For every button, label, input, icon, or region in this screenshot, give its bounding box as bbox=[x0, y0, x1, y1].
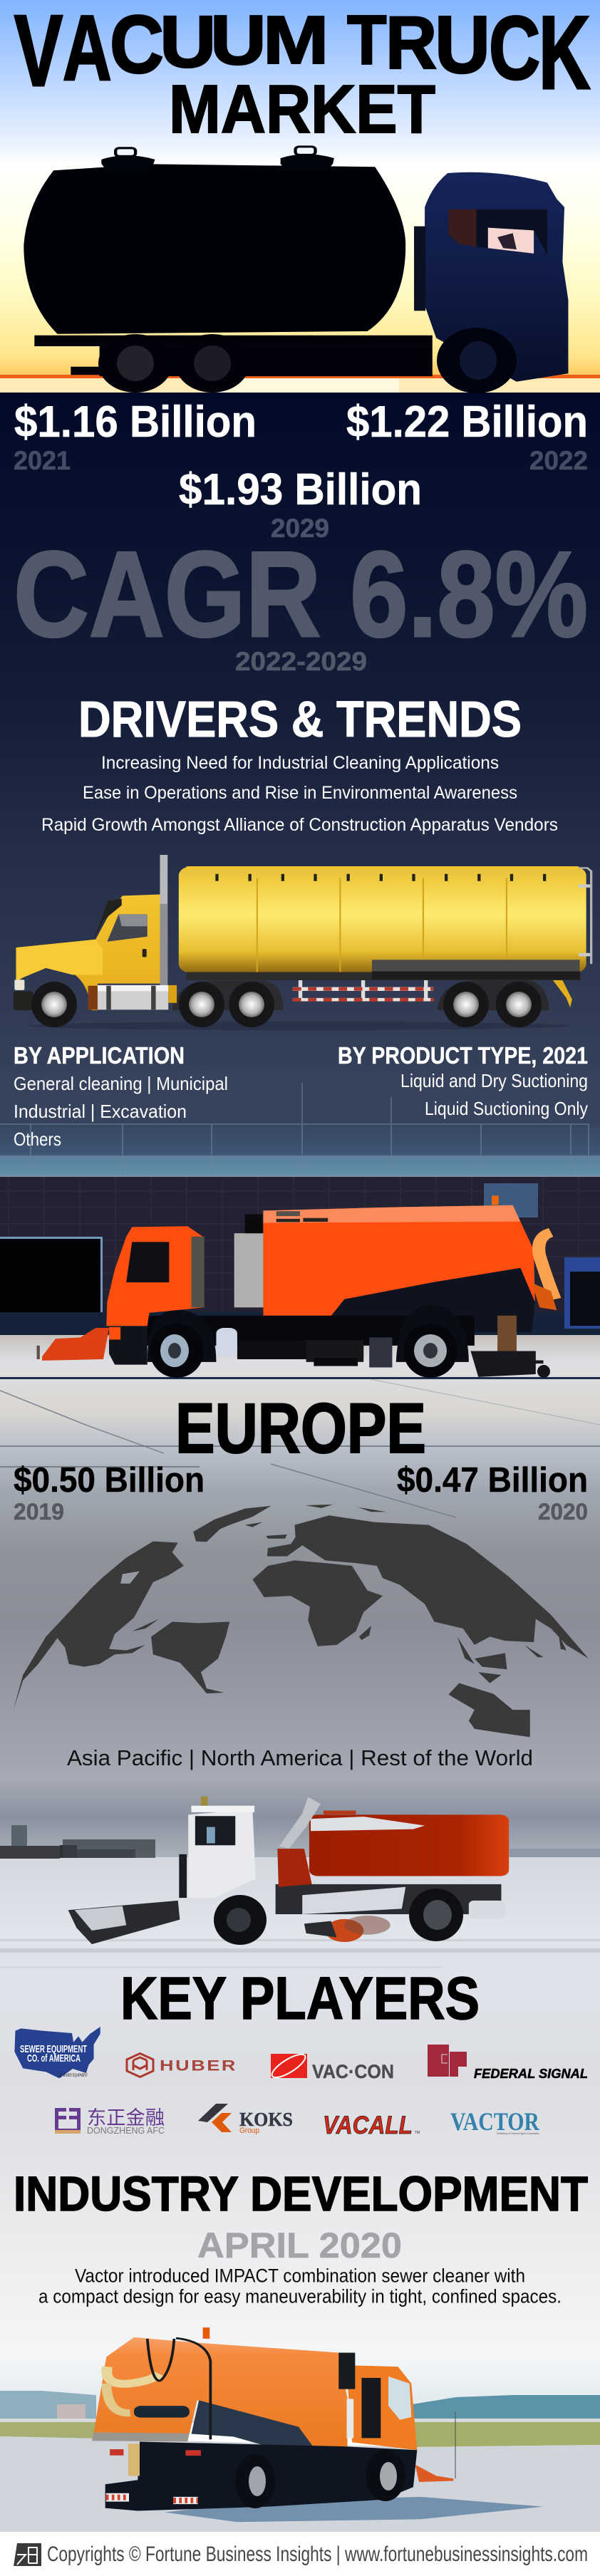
Europe 2020 year: 2020 bbox=[538, 1499, 588, 1525]
logo: Federal Signal bbox=[428, 2045, 588, 2081]
body bbox=[94, 2337, 348, 2446]
driver list: Ease in Operations and Rise in Environmental Awareness bbox=[83, 783, 517, 803]
heading: key players: KEY PLAYERS bbox=[120, 1965, 480, 2032]
chassis bbox=[276, 1884, 501, 1914]
logo: Huber: HUBER bbox=[160, 2057, 237, 2074]
Europe 2019 value: $0.50 Billion bbox=[14, 1461, 205, 1500]
building windows bbox=[0, 1073, 600, 1177]
wheels bbox=[150, 1324, 204, 1378]
brush bbox=[325, 1919, 363, 1942]
cab bbox=[346, 2365, 417, 2450]
driver list bbox=[41, 753, 558, 835]
tank bbox=[309, 1814, 509, 1876]
development date: APRIL 2020 bbox=[197, 2226, 402, 2265]
tank body bbox=[179, 866, 586, 973]
world map bbox=[14, 1505, 589, 1737]
wheels bbox=[214, 1895, 267, 1945]
title: C bbox=[110, 0, 164, 90]
stat: 2029 value: $1.93 Billion bbox=[179, 465, 422, 514]
development description bbox=[38, 2265, 562, 2307]
logo: Vactor: VACTOR bbox=[450, 2107, 540, 2136]
snow sky bbox=[0, 1775, 600, 1858]
cab bbox=[425, 172, 568, 382]
stat: 2021 year: 2021 bbox=[14, 446, 71, 475]
body bbox=[263, 1205, 535, 1319]
wheels bbox=[31, 982, 542, 1027]
snow tracks bbox=[0, 1939, 600, 1968]
application list: Others bbox=[14, 1128, 61, 1150]
Greenland bbox=[193, 1506, 271, 1542]
Africa bbox=[252, 1560, 383, 1646]
South America bbox=[151, 1621, 229, 1693]
stat: 2021 value: $1.16 Billion bbox=[14, 398, 257, 447]
application list bbox=[14, 1073, 228, 1150]
logo: Dongzheng bbox=[55, 2107, 165, 2136]
orange sweeper truck bbox=[92, 2327, 544, 2522]
logo: Vac-Con bbox=[269, 2050, 394, 2082]
panel bbox=[216, 1328, 237, 1356]
snow scene background bbox=[0, 1825, 600, 1859]
ground lines bbox=[0, 1377, 600, 1517]
logo: KOKS bbox=[198, 2104, 293, 2135]
heading: drivers and trends: DRIVERS & TRENDS bbox=[78, 692, 522, 748]
title: M bbox=[263, 1, 329, 78]
stat: 2022 value: $1.22 Billion bbox=[346, 398, 588, 447]
heading: Europe: EUROPE bbox=[175, 1388, 426, 1468]
logo: Vacall: TM bbox=[415, 2131, 420, 2135]
chassis bbox=[145, 1316, 475, 1346]
title: U bbox=[210, 1, 267, 79]
front broom bbox=[42, 1328, 109, 1361]
logo: KOKS: Group bbox=[239, 2126, 259, 2135]
title: T bbox=[347, 1, 387, 80]
title: R bbox=[386, 1, 437, 85]
cab bbox=[16, 894, 161, 1010]
Europe 2019 year: 2019 bbox=[14, 1499, 64, 1525]
title: U bbox=[160, 1, 216, 83]
Eurasia bbox=[267, 1515, 589, 1658]
logo: Dongzheng: 东正金融 bbox=[87, 2107, 165, 2129]
frame and skirt bbox=[187, 972, 581, 980]
ground bbox=[0, 1335, 600, 1777]
cab bbox=[188, 1809, 256, 1898]
Australia bbox=[448, 1683, 530, 1737]
footer band bbox=[0, 2532, 600, 2576]
product type list bbox=[400, 1070, 588, 1119]
driver list: Increasing Need for Industrial Cleaning Applications bbox=[101, 753, 499, 773]
shadow line bbox=[0, 1377, 600, 1379]
hatches bbox=[101, 147, 334, 175]
development description: Vactor introduced IMPACT combination sewer cleaner with bbox=[75, 2265, 525, 2287]
navy background bbox=[0, 393, 600, 1123]
stat: 2022 year: 2022 bbox=[529, 446, 588, 475]
logo: Sewer Equipment bbox=[14, 2027, 100, 2078]
region list: Asia Pacific | North America | Rest of the World bbox=[67, 1745, 533, 1770]
title: C bbox=[489, 0, 540, 99]
snow plough tanker truck bbox=[68, 1797, 509, 1945]
logo: Vacall: VACALL bbox=[323, 2112, 413, 2139]
plough bbox=[68, 1901, 180, 1944]
orange street sweeper bbox=[0, 1195, 600, 1379]
logo: Dongzheng: DONGZHENG AFC bbox=[87, 2125, 165, 2136]
hoses bbox=[107, 2367, 159, 2384]
application list: Industrial | Excavation bbox=[14, 1101, 187, 1122]
logo: Huber bbox=[127, 2053, 237, 2077]
stat: 2029 year: 2029 bbox=[271, 514, 329, 543]
compartment bbox=[234, 1233, 263, 1307]
logo: Sewer Equipment: SEWER EQUIPMENT bbox=[20, 2043, 87, 2055]
footer logo bbox=[14, 2543, 41, 2566]
logo: Vactor: Subsidiary of Federal Signal Corporation bbox=[497, 2131, 539, 2135]
Europe 2020 value: $0.47 Billion bbox=[397, 1461, 588, 1500]
chassis bbox=[105, 2441, 417, 2511]
wheels bbox=[235, 2454, 275, 2508]
windows bbox=[448, 209, 477, 246]
logo: KOKS: KOKS bbox=[239, 2109, 293, 2130]
silhouette tanker truck bbox=[24, 147, 568, 393]
title bbox=[14, 0, 590, 147]
driver list: Rapid Growth Amongst Alliance of Construction Apparatus Vendors bbox=[41, 815, 558, 835]
hose bbox=[539, 1232, 555, 1299]
logo: Sewer Equipment: by SEWER EQUIPMENT bbox=[59, 2074, 88, 2078]
logo: Vac-Con: VAC·CON bbox=[312, 2061, 394, 2082]
logo: Federal Signal: FEDERAL SIGNAL bbox=[474, 2067, 588, 2081]
CAGR period: 2022-2029 bbox=[235, 647, 367, 676]
rear broom bbox=[471, 1351, 536, 1377]
title: MARKET bbox=[169, 71, 435, 147]
tank bbox=[24, 164, 405, 334]
airfield landscape bbox=[0, 2391, 600, 2533]
horizon band bbox=[0, 375, 600, 393]
cab bbox=[106, 1226, 204, 1326]
yellow tanker truck bbox=[14, 855, 591, 1030]
snow field bbox=[0, 1857, 600, 2420]
exhaust and duct bbox=[277, 1849, 312, 1887]
sky background bbox=[0, 0, 600, 393]
safety bars bbox=[293, 980, 433, 1002]
wheels bbox=[98, 334, 172, 393]
heading: by application: BY APPLICATION bbox=[14, 1042, 185, 1069]
chassis bbox=[34, 336, 433, 346]
title: U bbox=[435, 0, 490, 90]
shadow bbox=[165, 2497, 544, 2522]
application list: General cleaning | Municipal bbox=[14, 1073, 228, 1094]
ground shadow bbox=[29, 1022, 570, 1030]
North America bbox=[14, 1542, 184, 1710]
dark wall bbox=[0, 1177, 600, 1335]
logo: Sewer Equipment: CO. of AMERICA bbox=[27, 2052, 81, 2065]
